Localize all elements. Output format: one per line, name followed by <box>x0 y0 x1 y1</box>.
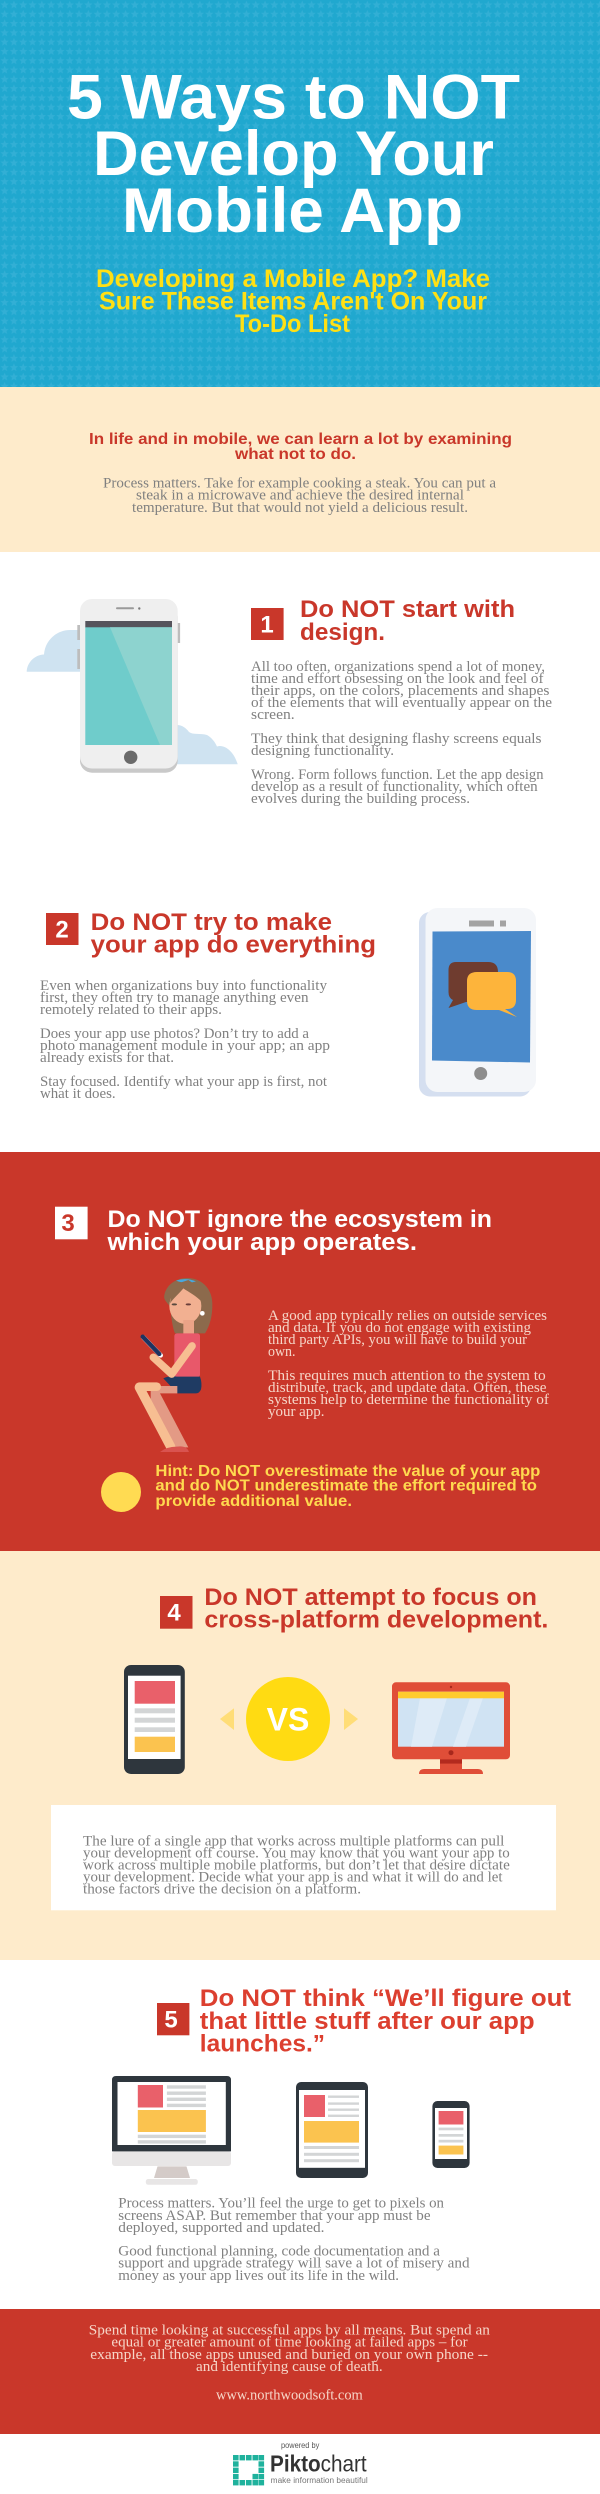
section 3 badge: 3 <box>61 1210 75 1237</box>
section 5 heading: launches.” <box>200 2031 325 2058</box>
text card: your development. Decide what your app is and what it will do and let <box>83 1869 503 1885</box>
section 4 heading <box>204 1584 548 1634</box>
panel: closing <box>0 2309 600 2434</box>
section 2 heading: Do NOT try to make <box>91 909 332 936</box>
section 3 text: third party APIs, you will have to build your <box>268 1332 527 1348</box>
section 1 text: designing functionality. <box>251 743 394 759</box>
section 2 badge <box>46 913 78 945</box>
panel: header <box>0 0 600 387</box>
section 4 heading: cross-platform development. <box>204 1607 548 1634</box>
text card: your development off course. You may know that you want your app to <box>83 1845 510 1861</box>
icon: tablet <box>296 2082 368 2178</box>
icon: phone with chat bubbles <box>419 908 536 1096</box>
section 1 text <box>251 659 552 807</box>
icon: phone with clouds <box>27 599 238 773</box>
section 1 heading: design. <box>300 619 385 646</box>
section 2 text: what it does. <box>40 1086 116 1102</box>
icon: desktop monitor <box>392 1682 510 1774</box>
section 5 text: support and upgrade strategy will save a lot of misery and <box>118 2256 470 2272</box>
section 5 text: money as your app lives out its life in the wild. <box>118 2268 399 2284</box>
intro text <box>103 476 497 516</box>
section 1 text: They think that designing flashy screens equals <box>251 731 542 747</box>
section 1 text: their apps, on the colors, placements and shapes <box>251 683 550 699</box>
section 3 heading: Do NOT ignore the ecosystem in <box>108 1206 492 1233</box>
hint text <box>155 1463 541 1510</box>
section 3 heading: which your app operates. <box>106 1229 417 1256</box>
subtitle: To-Do List <box>235 310 351 338</box>
title: Mobile App <box>122 176 463 246</box>
intro heading: In life and in mobile, we can learn a lot by examining <box>89 431 512 448</box>
icon: small phone <box>432 2101 470 2168</box>
illustration: woman with phone <box>139 1278 212 1452</box>
closing text: Spend time looking at successful apps by all means. But spend an <box>89 2323 491 2339</box>
section 4 badge: 4 <box>167 1600 181 1626</box>
section 5 badge <box>157 2003 189 2035</box>
closing text: example, all those apps unused and buried on your own phone -- <box>90 2347 488 2363</box>
hint text: Hint: Do NOT overestimate the value of your app <box>155 1463 541 1480</box>
panel: section 3 <box>0 1152 600 1551</box>
section 5 badge: 5 <box>164 2006 178 2034</box>
icon: Piktochart mark <box>233 2455 264 2485</box>
section 5 text: screens ASAP. But remember that your app must be <box>118 2208 431 2224</box>
hint text: and do NOT underestimate the effort required to <box>155 1478 537 1495</box>
text card: those factors drive the decision on a platform. <box>83 1881 361 1897</box>
section 3 heading <box>106 1206 492 1256</box>
section 3 badge <box>55 1207 88 1239</box>
section 3 text: A good app typically relies on outside services <box>268 1308 547 1324</box>
panel: section 5 <box>0 1960 600 2309</box>
hint text: provide additional value. <box>155 1493 352 1510</box>
section 2 text: Stay focused. Identify what your app is first, not <box>40 1074 327 1090</box>
title: Develop Your <box>93 119 494 189</box>
section 1 text: All too often, organizations spend a lot of money, <box>251 659 545 675</box>
section 3 text: your app. <box>268 1404 324 1420</box>
section 3 text: and data. If you do not engage with existing <box>268 1320 531 1336</box>
icon: desktop <box>112 2076 231 2185</box>
section 1 badge: 1 <box>260 612 274 638</box>
section 2 text: already exists for that. <box>40 1050 174 1066</box>
title <box>67 63 520 246</box>
section 2 heading <box>91 909 376 959</box>
section 2 text: Even when organizations buy into functionality <box>40 978 328 994</box>
section 4 heading: Do NOT attempt to focus on <box>204 1584 537 1611</box>
section 2 text: photo management module in your app; an app <box>40 1038 330 1054</box>
footer: Piktochart logo: powered by <box>281 2441 319 2450</box>
subtitle: Developing a Mobile App? Make <box>96 265 490 293</box>
section 4 badge <box>160 1596 192 1629</box>
intro text: steak in a microwave and achieve the desired internal <box>136 488 464 504</box>
icon: hint bulb circle <box>101 1472 141 1512</box>
footer: Piktochart logo <box>233 2441 368 2485</box>
text card: work across multiple mobile platforms, but don’t let that desire dictate <box>83 1857 510 1873</box>
section 5 heading <box>200 1985 571 2058</box>
closing text: equal or greater amount of time looking at failed apps – for <box>111 2335 468 2351</box>
section 1 text: Wrong. Form follows function. Let the app design <box>251 767 544 783</box>
section 5 text: Good functional planning, code documentation and a <box>118 2244 441 2260</box>
text card: The lure of a single app that works across multiple platforms can pull <box>83 1833 504 1849</box>
intro heading: what not to do. <box>234 446 356 463</box>
text card <box>51 1805 556 1910</box>
section 1 text: evolves during the building process. <box>251 791 470 807</box>
section 2 badge: 2 <box>55 916 69 944</box>
intro heading <box>89 431 512 463</box>
section 2 text: Does your app use photos? Don’t try to add a <box>40 1026 310 1042</box>
VS badge with arrows: VS <box>267 1702 309 1738</box>
section 1 text: time and effort obsessing on the look and feel of <box>251 671 544 687</box>
closing text: and identifying cause of death. <box>196 2359 383 2375</box>
section 2 text: remotely related to their apps. <box>40 1002 222 1018</box>
section 1 heading <box>300 596 515 646</box>
section 1 text: of the elements that will eventually appear on the <box>251 695 552 711</box>
icon: phone <box>124 1665 185 1774</box>
intro text: temperature. But that would not yield a delicious result. <box>132 500 468 516</box>
subtitle <box>96 265 490 338</box>
section 5 text: Process matters. You’ll feel the urge to get to pixels on <box>118 2196 445 2212</box>
section 3 text: own. <box>268 1344 296 1360</box>
section 2 text <box>40 978 330 1102</box>
section 2 heading: your app do everything <box>91 932 376 959</box>
VS badge with arrows <box>220 1677 358 1761</box>
section 5 text: deployed, supported and updated. <box>118 2220 324 2236</box>
section 5 text <box>118 2196 470 2284</box>
website link: www.northwoodsoft.com <box>216 2388 364 2404</box>
section 1 badge <box>251 608 284 640</box>
section 3 text: This requires much attention to the system to <box>268 1368 546 1384</box>
section 2 text: first, they often try to manage anything even <box>40 990 309 1006</box>
closing text <box>89 2323 491 2375</box>
title: 5 Ways to NOT <box>67 63 520 133</box>
section 3 text: systems help to determine the functionality of <box>268 1392 549 1408</box>
wordmark: Piktochart <box>270 2451 367 2477</box>
panel: white sections 1 and 2 <box>0 552 600 1152</box>
tagline: make information beautiful <box>271 2476 368 2485</box>
section 1 text: screen. <box>251 707 295 723</box>
intro text: Process matters. Take for example cooking a steak. You can put a <box>103 476 497 492</box>
section 5 heading: Do NOT think “We’ll figure out <box>200 1985 571 2012</box>
section 5 heading: that little stuff after our app <box>200 2008 535 2035</box>
subtitle: Sure These Items Aren't On Your <box>99 288 487 316</box>
section 1 text: develop as a result of functionality, which often <box>251 779 538 795</box>
section 1 heading: Do NOT start with <box>300 596 515 623</box>
panel: section 4 <box>0 1551 600 1960</box>
panel: introduction <box>0 387 600 552</box>
section 3 text: distribute, track, and update data. Often, these <box>268 1380 546 1396</box>
section 3 text <box>268 1308 549 1420</box>
